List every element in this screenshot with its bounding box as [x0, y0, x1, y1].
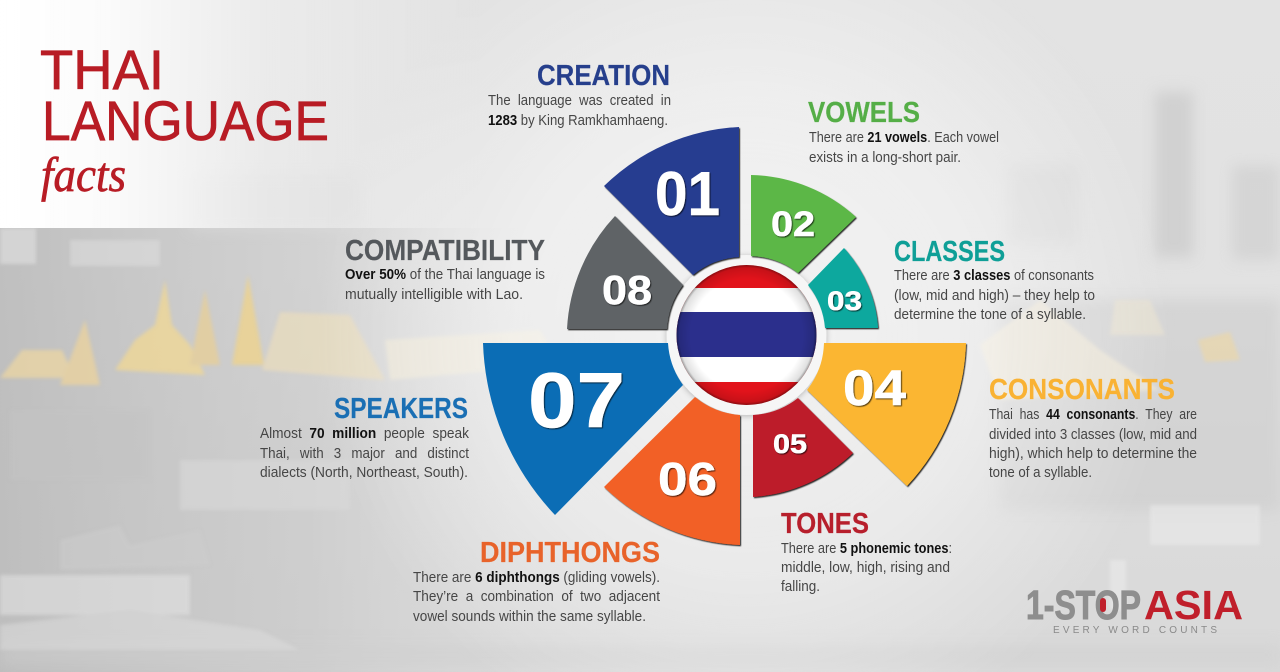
text block: diphthongs: DIPHTHONGS: [480, 537, 660, 569]
text block: speakers: Almost 70 million people speak: [260, 426, 470, 442]
segment 04: 04: [843, 360, 906, 416]
title: THAI: [40, 38, 164, 101]
segment 05: [753, 398, 853, 497]
text block: tones: middle, low, high, rising and: [781, 560, 950, 576]
text block: diphthongs: There are 6 diphthongs (gliding vowels).: [413, 570, 660, 586]
text block: consonants: high), which help to determine the: [989, 446, 1197, 462]
text block: compatibility: COMPATIBILITY: [345, 235, 545, 267]
text block: tones: TONES: [781, 508, 869, 540]
segment 02: [751, 175, 856, 273]
segment 02: 02: [771, 205, 815, 244]
text block: classes: determine the tone of a syllable.: [894, 307, 1086, 323]
text block: consonants: [989, 374, 1197, 481]
text block: speakers: Thai, with 3 major and distinct: [260, 446, 469, 462]
text block: vowels: [808, 97, 999, 166]
title: [40, 38, 329, 202]
text block: tones: [781, 508, 952, 595]
title: facts: [41, 147, 126, 202]
segment 06: 06: [658, 453, 717, 505]
text block: classes: CLASSES: [894, 236, 1005, 268]
logo: 1-Stop Asia: [1026, 582, 1243, 636]
title: LANGUAGE: [42, 89, 329, 152]
text block: diphthongs: vowel sounds within the same syllable.: [413, 609, 646, 625]
text block: speakers: [260, 393, 470, 481]
text block: creation: The language was created in: [488, 93, 671, 109]
logo: 1-Stop Asia: 1-STOP: [1026, 582, 1141, 628]
text block: creation: CREATION: [537, 60, 670, 92]
text block: vowels: VOWELS: [808, 97, 920, 129]
segment 03: 03: [827, 286, 862, 316]
logo: 1-Stop Asia: ASIA: [1144, 582, 1243, 628]
wheel of numbered segments: [483, 127, 966, 545]
text block: compatibility: Over 50% of the Thai language is: [345, 267, 545, 283]
segment 08: 08: [602, 267, 652, 313]
text block: consonants: divided into 3 classes (low, mid and: [989, 427, 1197, 443]
text block: compatibility: [345, 235, 545, 303]
text block: consonants: Thai has 44 consonants. They are: [989, 407, 1197, 423]
text block: diphthongs: [413, 537, 660, 625]
text block: classes: There are 3 classes of consonants: [894, 268, 1094, 284]
text block: speakers: dialects (North, Northeast, South).: [260, 465, 468, 481]
segment 01: 01: [655, 160, 720, 229]
segment 07: 07: [528, 356, 625, 444]
segment 01: [604, 127, 739, 275]
text block: classes: [894, 236, 1095, 323]
segment 06: [604, 397, 740, 545]
text block: consonants: CONSONANTS: [989, 374, 1175, 406]
segment 08: [567, 216, 683, 329]
segment 03: [808, 248, 878, 328]
text block: compatibility: mutually intelligible with Lao.: [345, 287, 523, 303]
segment 07: [483, 343, 683, 515]
text block: creation: [488, 60, 671, 129]
text block: creation: 1283 by King Ramkhamhaeng.: [488, 113, 668, 129]
icon: Thai flag button: [676, 265, 817, 405]
segment 05: 05: [773, 429, 807, 459]
text block: vowels: exists in a long-short pair.: [809, 150, 961, 166]
text block: consonants: tone of a syllable.: [989, 465, 1092, 481]
segment 04: [807, 343, 966, 486]
white top-left title panel: [0, 0, 480, 228]
text block: classes: (low, mid and high) – they help to: [894, 288, 1095, 304]
text block: speakers: SPEAKERS: [334, 393, 468, 425]
text block: tones: There are 5 phonemic tones:: [781, 541, 952, 557]
logo: 1-Stop Asia: EVERY WORD COUNTS: [1053, 625, 1217, 636]
text block: tones: falling.: [781, 579, 820, 595]
centre disc: [666, 255, 826, 415]
text block: diphthongs: They’re a combination of two adjacent: [413, 589, 660, 605]
text block: vowels: There are 21 vowels. Each vowel: [809, 130, 999, 146]
